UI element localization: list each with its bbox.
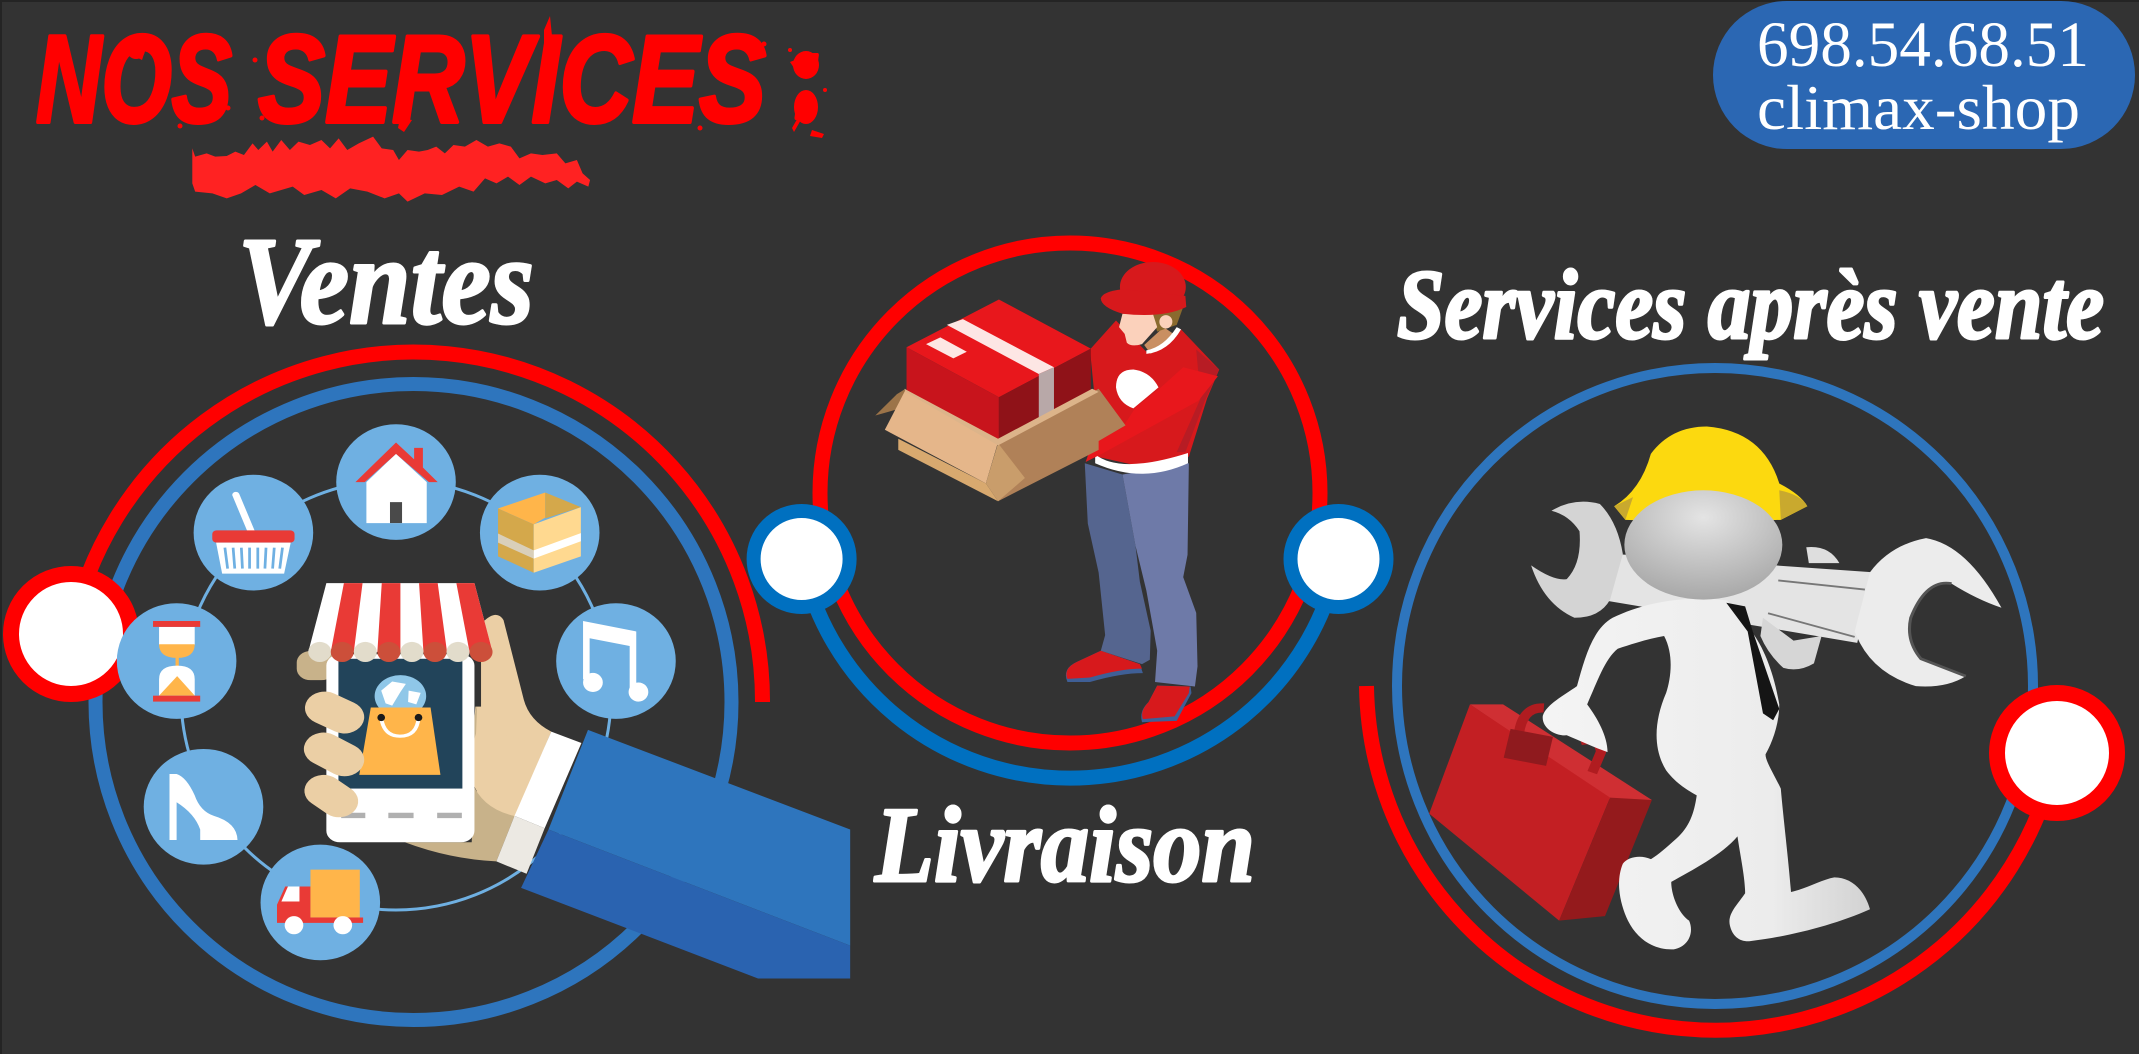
hand holding phone <box>297 583 551 861</box>
contact pill <box>1713 1 2135 149</box>
red node <box>1997 693 2117 813</box>
jacket sleeve <box>521 730 850 978</box>
brush underline <box>192 137 590 202</box>
title: NOS <box>36 11 232 149</box>
wrench <box>1531 502 2001 686</box>
title: SERVICES <box>258 11 766 149</box>
shop name: climax-shop <box>1757 72 2080 143</box>
toolbox <box>1429 704 1652 921</box>
right blue node <box>1290 511 1386 607</box>
hard hat <box>1614 427 1807 522</box>
title: : <box>792 7 822 145</box>
blue ring <box>96 384 732 1020</box>
icon: hourglass <box>117 603 236 719</box>
phone number: 698.54.68.51 <box>1757 9 2089 81</box>
red ring <box>820 243 1320 743</box>
worker with wrench and toolbox <box>1429 427 2001 949</box>
icon: truck <box>261 845 380 960</box>
icon: box <box>480 475 600 590</box>
panel: services après vente <box>1366 368 2117 1030</box>
panel: livraison <box>754 243 1386 778</box>
red node <box>11 574 131 694</box>
red arc <box>71 352 763 702</box>
heading: Ventes: Ventes <box>238 213 534 351</box>
icon: house <box>336 424 456 540</box>
title <box>36 7 827 165</box>
blue ring <box>1397 368 2033 1004</box>
icon: high heel <box>144 749 263 865</box>
red arc <box>1366 686 2057 1030</box>
head <box>1624 490 1782 600</box>
left blue node <box>754 511 850 607</box>
shirt cuff <box>496 732 581 874</box>
blue arc <box>802 559 1338 778</box>
heading: Livraison: Livraison <box>874 786 1255 905</box>
panel: ventes <box>11 352 850 1020</box>
thin orbit ring <box>181 480 611 910</box>
delivery man with parcel <box>875 262 1219 722</box>
icon: music note <box>556 603 676 719</box>
icon: basket <box>194 475 313 590</box>
service illustration <box>117 424 850 978</box>
body <box>1543 599 1870 949</box>
